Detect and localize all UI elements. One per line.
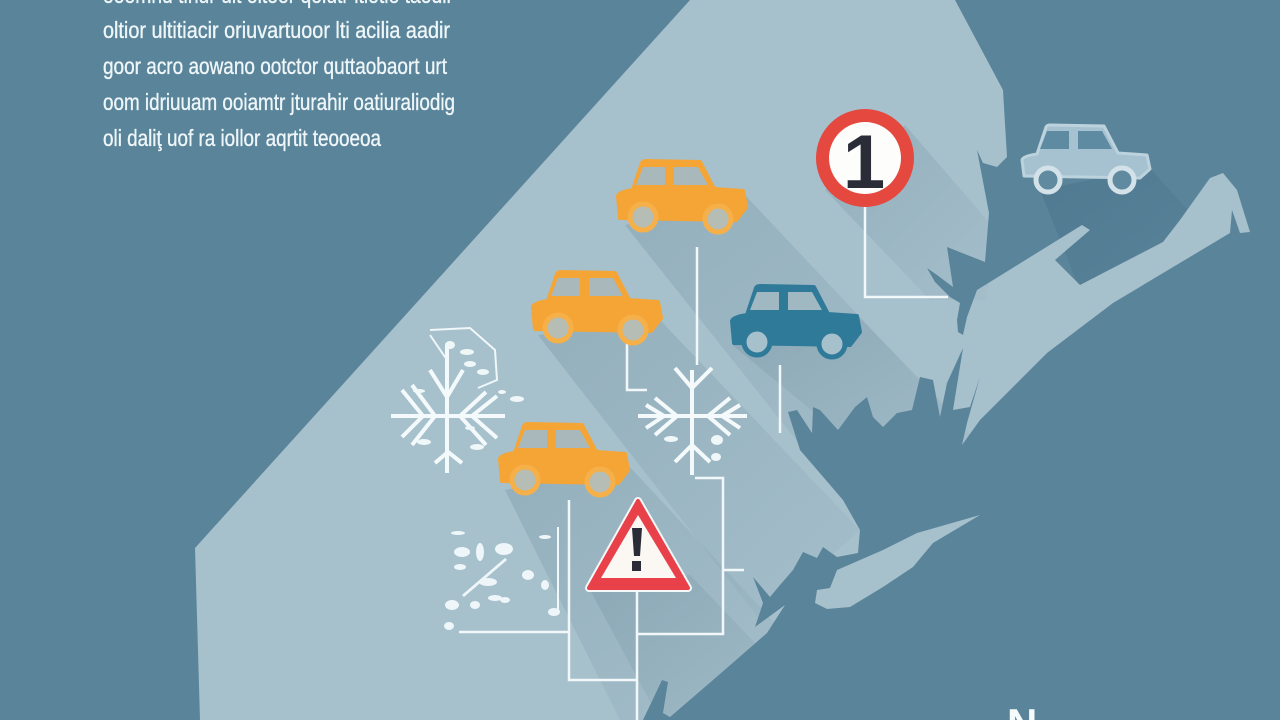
text block: intro paragraph: goor acro aowano ootctor quttaobaort urt [103,53,447,79]
icon: scattered leaves [444,531,560,630]
icon: orange car bottom [500,424,628,495]
connector lines [459,205,948,720]
island [815,515,980,609]
icon: orange car middle [533,272,661,343]
shadow: grey car on sea [1040,168,1192,290]
icon: warning triangle [589,501,688,588]
icon: speed sign 1 [816,109,914,207]
text block: intro paragraph: oli daliţ uof ra iollor aqrtit teooeoa [103,125,381,151]
icon: blue car [732,286,860,357]
text block: intro paragraph [103,0,455,151]
icon: snowflake right [638,368,747,475]
text block: intro paragraph: oom idriuuam ooiamtr jturahir oatiuraliodig [103,89,455,115]
icon: speed sign 1: 1 [843,120,885,205]
icon: grey car [1022,125,1150,192]
icon: orange car top [618,161,746,232]
icon: snowflake left with foliage [391,328,524,473]
text block: intro paragraph: oltior ultitiacir oriuvartuoor lti acilia aadir [103,17,450,43]
